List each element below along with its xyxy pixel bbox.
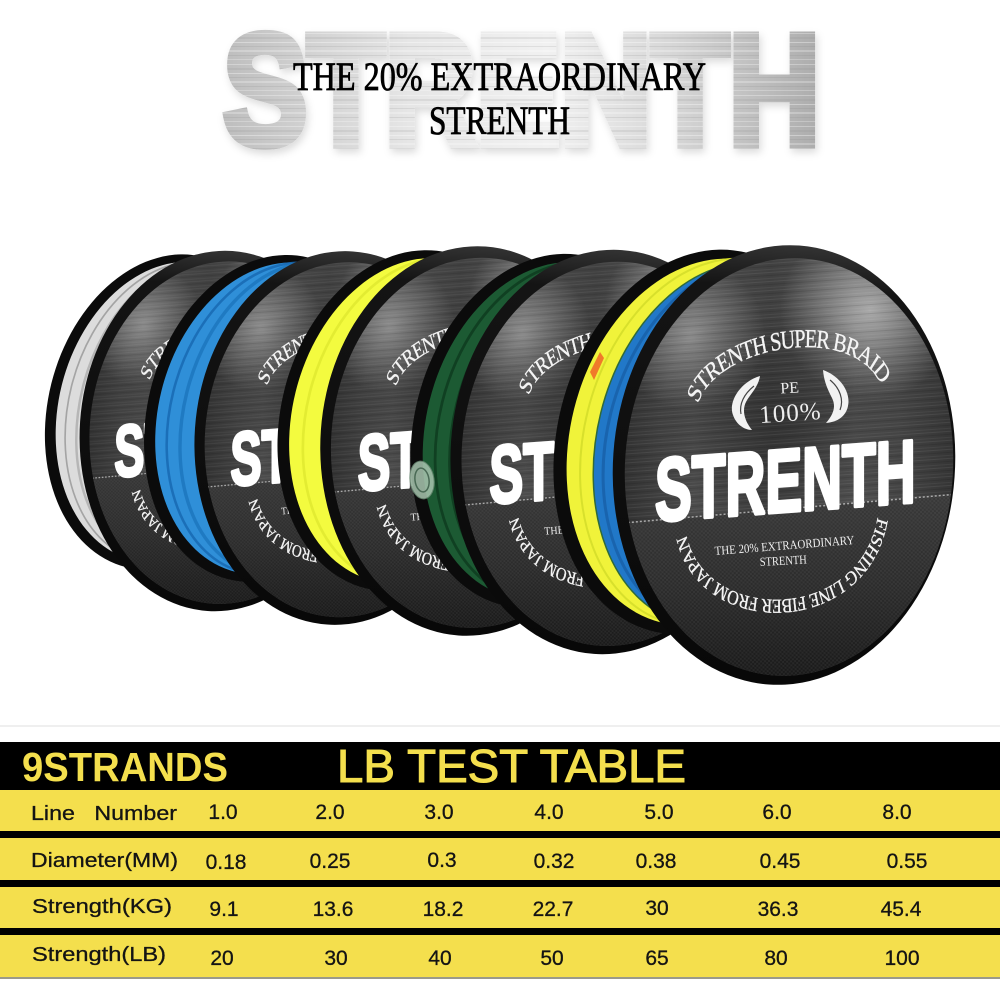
- row: line number: 4.0: [534, 801, 564, 824]
- row: line number: 1.0: [208, 801, 238, 824]
- row: strength in lb: 30: [324, 947, 348, 970]
- label face: [624, 258, 954, 676]
- row: strength in lb: 20: [210, 947, 234, 970]
- label face: [331, 258, 520, 628]
- arc heading: STRENTH SUPER BRAID: [386, 328, 448, 386]
- small tagline: THE 20% EXTRAORDINARY: [163, 488, 278, 508]
- header: brushed metal wordmark with tagline: [223, 3, 820, 178]
- label face: [90, 262, 258, 604]
- row: line number: 3.0: [424, 801, 454, 824]
- spool: white line: [44, 250, 328, 612]
- tagline line two: STRENTH: [429, 98, 570, 143]
- label face: [204, 262, 388, 618]
- arc heading: STRENTH SUPER BRAID: [520, 332, 590, 394]
- row: strength in kg: Strength(KG): [32, 895, 172, 918]
- front flange: [598, 234, 970, 696]
- arc origin text: FISHING LINE FIBER FROM JAPAN: [508, 518, 583, 587]
- brushed metal word STRENTH: STRENTH: [223, 3, 820, 178]
- front flange: [307, 236, 637, 646]
- row: diameter: 0.3: [427, 849, 457, 872]
- row: strength in kg: 22.7: [533, 898, 573, 921]
- arc origin text: FISHING LINE FIBER FROM JAPAN: [376, 504, 448, 571]
- 100% label: 100%: [758, 398, 823, 429]
- spool body with green line: [374, 225, 723, 637]
- spool body with white line: [13, 229, 320, 596]
- spool row: [44, 245, 956, 685]
- row: line number: 8.0: [882, 801, 912, 824]
- row: diameter: [31, 849, 927, 874]
- heading: LB TEST TABLE: LB TEST TABLE: [337, 740, 686, 792]
- row: diameter: 0.18: [206, 851, 246, 874]
- heading: 9STRANDS: 9STRANDS: [22, 744, 228, 790]
- spool: blue line: [144, 251, 452, 625]
- row: strength in lb: 50: [540, 947, 564, 970]
- spool: multicolor line, front: [554, 245, 956, 685]
- row: strength in kg: 30: [645, 897, 669, 920]
- arc origin text: FISHING LINE FIBER FROM JAPAN: [676, 518, 888, 613]
- icon: left fish: [732, 376, 760, 430]
- small tagline: THE 20% EXTRAORDINARY: [544, 516, 673, 538]
- row: strength in lb: 80: [764, 947, 788, 970]
- row: diameter: 0.38: [636, 850, 676, 873]
- brand wordmark: STRENTH: [358, 403, 589, 507]
- table: 9 strands LB test: [0, 725, 1000, 979]
- row: strength in kg: 9.1: [209, 898, 239, 921]
- row: strength in kg: 45.4: [881, 898, 922, 921]
- icon: round sticker on green spool: [407, 460, 437, 500]
- PE label: PE: [780, 380, 800, 397]
- small tagline line one: THE 20% EXTRAORDINARY: [714, 533, 855, 558]
- brand wordmark: STRENTH: [655, 421, 916, 540]
- spool: yellow line: [277, 246, 589, 636]
- front flange: [182, 241, 498, 635]
- small tagline: THE 20% EXTRAORDINARY: [410, 503, 535, 524]
- row: line number: [31, 801, 912, 825]
- row: diameter: 0.32: [534, 850, 574, 873]
- row: diameter: 0.55: [887, 850, 927, 873]
- row: line number: 5.0: [644, 801, 674, 824]
- brand wordmark: STRENTH: [114, 395, 328, 493]
- row: line number: 2.0: [315, 801, 345, 824]
- arc heading: STRENTH SUPER BRAID: [258, 333, 307, 385]
- icon: right fish: [823, 370, 848, 423]
- row: strength in lb: [32, 943, 920, 970]
- spool body with yellow line: [243, 222, 573, 619]
- small tagline: THE 20% EXTRAORDINARY: [281, 497, 401, 517]
- brand wordmark: STRENTH: [230, 402, 452, 502]
- row: diameter: 0.25: [310, 850, 350, 873]
- front flange: [68, 241, 372, 621]
- front flange: [437, 239, 779, 665]
- row: strength in kg: [32, 895, 922, 921]
- row: strength in kg: 13.6: [313, 898, 353, 921]
- spool body with multicolor line: [514, 218, 904, 666]
- row: strength in kg: 36.3: [758, 898, 798, 921]
- row: line number: 6.0: [762, 801, 792, 824]
- small tagline line two: STRENTH: [759, 553, 807, 569]
- row: strength in lb: Strength(LB): [32, 943, 166, 966]
- row: strength in kg: 18.2: [423, 898, 463, 921]
- row: diameter: Diameter(MM): [31, 849, 178, 872]
- row: line number: Line Number: [31, 802, 177, 825]
- arc heading: STRENTH SUPER BRAID: [141, 339, 170, 380]
- arc origin text: FISHING LINE FIBER FROM JAPAN: [248, 499, 317, 562]
- arc heading: STRENTH SUPER BRAID: [688, 330, 890, 402]
- tagline line one: THE 20% EXTRAORDINARY: [293, 54, 706, 99]
- row: strength in lb: 65: [645, 947, 669, 970]
- label face: [462, 262, 662, 646]
- row: diameter: 0.45: [760, 850, 800, 873]
- row: strength in lb: 100: [884, 947, 920, 970]
- spool body with blue line: [111, 228, 433, 609]
- arc origin text: FISHING LINE FIBER FROM JAPAN: [132, 490, 177, 546]
- table row backgrounds: [0, 790, 1000, 977]
- brand wordmark: STRENTH: [489, 413, 729, 522]
- spool: green line: [410, 250, 729, 654]
- row: strength in lb: 40: [428, 947, 452, 970]
